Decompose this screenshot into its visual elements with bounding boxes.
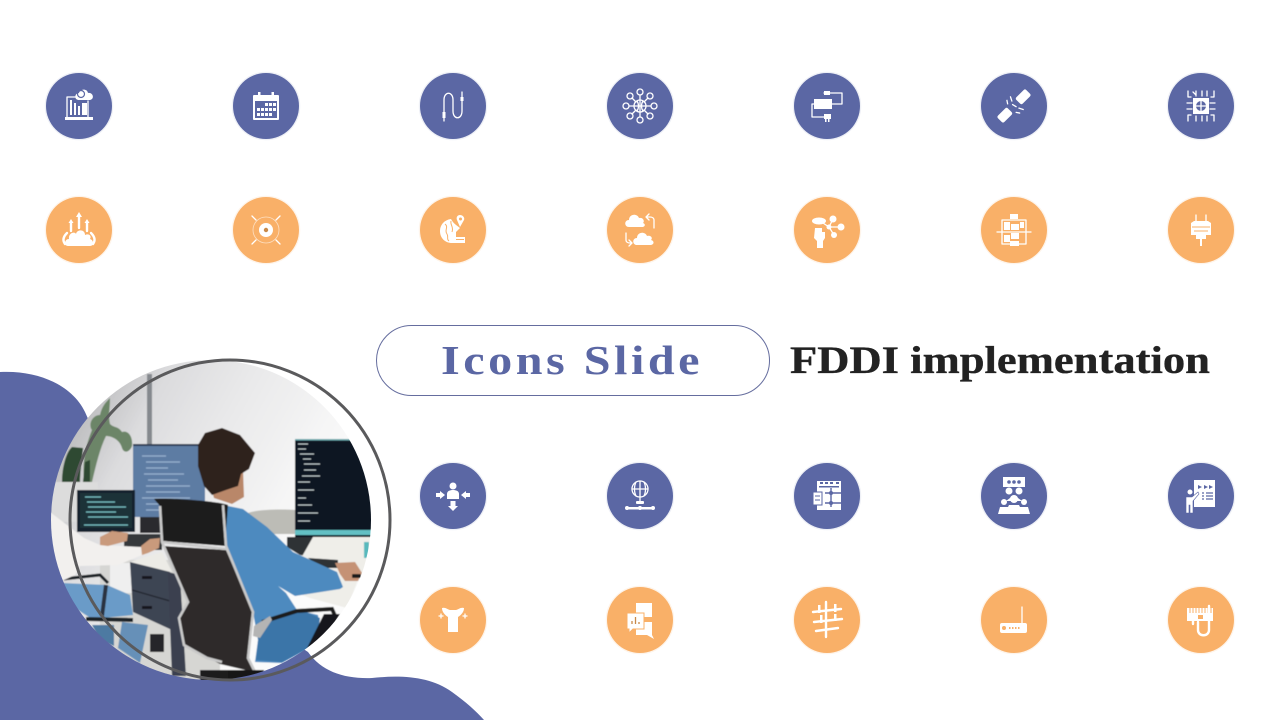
icon: calendar bbox=[232, 72, 300, 140]
icon: network cable plug bbox=[1168, 586, 1234, 654]
heading pill: Icons Slide bbox=[376, 326, 770, 396]
chair chrome frame bbox=[160, 505, 255, 672]
desk left part bbox=[131, 560, 172, 572]
heading pill: Icons Slide: Icons Slide bbox=[441, 337, 703, 383]
drawers bbox=[130, 562, 172, 630]
monitor stand bbox=[287, 537, 313, 557]
right monitor bbox=[295, 439, 375, 537]
chair armrest bbox=[262, 609, 336, 622]
decorative blob: bottom left background bbox=[0, 372, 484, 720]
icon: wifi router bbox=[980, 586, 1048, 654]
icon: person with directional arrows bbox=[420, 462, 486, 530]
photo: developers working at computers bbox=[50, 360, 375, 682]
icon: hand holding node diagram bbox=[794, 196, 860, 264]
icon: broken cable bbox=[980, 72, 1048, 140]
icon: laptop with cloud support bbox=[46, 72, 112, 140]
icon: Y-shaped pipe bbox=[420, 586, 486, 654]
icon: flowchart block diagram bbox=[980, 196, 1048, 264]
left person jeans bbox=[62, 583, 133, 619]
icon: presenter at board bbox=[1168, 462, 1234, 530]
laptop bbox=[77, 490, 135, 532]
left person white shirt bbox=[50, 512, 142, 581]
icon: server table schematic bbox=[794, 462, 860, 530]
icon: chat bubbles with chart bbox=[606, 586, 674, 654]
icon: globe with pin bbox=[420, 196, 486, 264]
icon: globe chip bbox=[1168, 72, 1234, 140]
person denim shirt bbox=[223, 506, 343, 663]
icon: electric plug bbox=[1168, 196, 1234, 264]
photo background wall bbox=[51, 360, 371, 680]
icon: audio jack cable bbox=[420, 72, 486, 140]
icon: globe network of people bbox=[606, 72, 674, 140]
plant bbox=[83, 398, 132, 482]
floor base bbox=[150, 634, 164, 652]
plant dark leaves bbox=[62, 447, 90, 482]
icon: adapter with cable loop bbox=[794, 72, 860, 140]
icon: globe on network bar bbox=[606, 462, 674, 530]
keyboard bbox=[308, 558, 338, 568]
icon: audience with speech box bbox=[980, 462, 1048, 530]
left chair frame bbox=[63, 575, 108, 583]
desk leg bbox=[168, 572, 186, 676]
icon: cloud sync bbox=[606, 196, 674, 264]
icon: cloud with upward arrows bbox=[46, 196, 112, 264]
person hair bbox=[198, 428, 255, 495]
left person hands bbox=[100, 531, 160, 555]
photo outline ring bbox=[70, 360, 390, 680]
center monitor bbox=[133, 445, 205, 517]
heading: FDDI implementation: FDDI implementation bbox=[790, 339, 1210, 382]
icon: utility pole bbox=[794, 586, 860, 654]
laptop base bbox=[124, 534, 162, 550]
icon: target speaker bbox=[232, 196, 300, 264]
person neck bbox=[212, 472, 244, 504]
desk right part bbox=[302, 536, 370, 608]
office chair upper back bbox=[154, 498, 228, 546]
person hand bbox=[335, 562, 362, 581]
gray equipment behind bbox=[246, 509, 295, 534]
office chair lower back bbox=[163, 546, 254, 672]
